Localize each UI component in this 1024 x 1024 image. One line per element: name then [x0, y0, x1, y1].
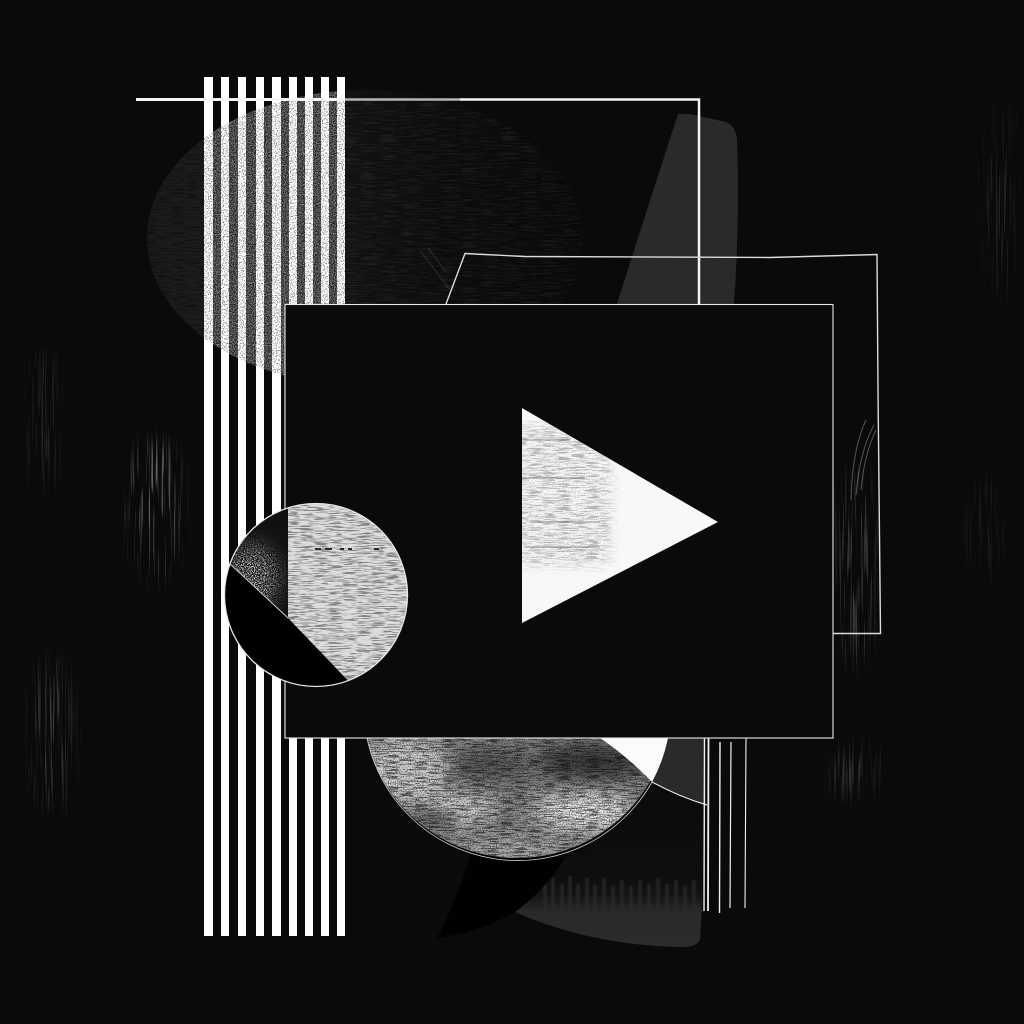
black segment	[215, 563, 347, 700]
curved scratches	[851, 420, 876, 500]
thin vertical lines	[704, 738, 746, 913]
central square panel	[285, 304, 833, 738]
dark textured wedge	[230, 508, 288, 617]
upper grey shard behind circle	[652, 738, 706, 804]
play triangle	[515, 408, 718, 623]
comb texture	[543, 876, 696, 904]
L-shaped frame line	[136, 100, 699, 304]
white disc segment	[600, 738, 668, 782]
big textured dark circle	[147, 91, 583, 376]
faint diagonal scratches	[420, 248, 450, 290]
light textured segment	[288, 500, 410, 690]
split circle	[224, 502, 408, 688]
lower grey shard	[515, 782, 707, 947]
black crescent	[437, 850, 565, 938]
back skewed frame line	[446, 254, 880, 634]
striped column	[204, 77, 345, 936]
background scratches	[32, 100, 1014, 815]
top grey shard	[617, 114, 738, 304]
stipple texture over stripes	[204, 101, 345, 374]
textured moon circle	[366, 738, 652, 861]
curved thin line	[652, 782, 707, 805]
